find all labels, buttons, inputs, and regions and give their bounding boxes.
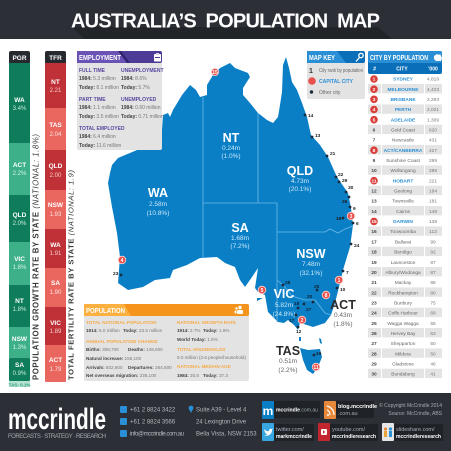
city names: Sunshine Coast — [386, 158, 421, 164]
rank numbers: 3 — [373, 97, 376, 103]
population figures: 1,309 — [427, 117, 439, 123]
city names: Bendigo — [394, 250, 412, 256]
rank numbers: 15 — [371, 219, 377, 225]
social: website: m — [263, 404, 273, 418]
icon: people — [234, 306, 243, 314]
state label: SA: 1.68m — [231, 235, 249, 242]
rank numbers: 29 — [371, 362, 377, 368]
rank numbers: 25 — [371, 321, 377, 327]
population figures: 1984: 30.5 — [177, 373, 199, 378]
panel: population growth rate column: PGR — [12, 55, 27, 62]
contact phone, fax, email — [120, 406, 184, 438]
panel: population growth rate column: 1.8% — [13, 265, 27, 271]
city names: ADELAIDE — [391, 117, 416, 123]
population figures: NATIONAL GROWTH RATE — [177, 320, 236, 325]
panel: population growth rate column: ACT — [13, 162, 26, 169]
panel: population growth rate column: NT — [15, 298, 24, 305]
city names: Wollongong — [390, 168, 416, 174]
capital city markers — [118, 68, 355, 371]
city rank labels: 17 — [289, 318, 295, 324]
employment figures: PART TIME — [79, 97, 106, 103]
state label: NSW: 7.48m — [302, 261, 320, 268]
Tasmania outline — [300, 348, 322, 374]
employment figures: UNEMPLOYMENT — [121, 68, 164, 74]
city names: Newcastle — [392, 138, 414, 144]
panel: total fertility rate column: TAS — [49, 122, 62, 129]
panel: total fertility rate column: NT — [51, 79, 60, 86]
city names: Shepparton — [391, 341, 416, 347]
panel: population growth rate column: 2.2% — [13, 171, 27, 177]
key rows: Other city — [319, 90, 341, 96]
city names: Cairns — [396, 209, 411, 215]
city names: Bunbury — [394, 300, 413, 306]
population figures: 1914: 2.7% — [177, 328, 200, 333]
rank numbers: 22 — [371, 290, 377, 296]
panel: population growth rate column: WA — [14, 97, 25, 104]
city rank labels: 21 — [330, 151, 336, 157]
state label: NT — [221, 131, 241, 160]
contact address: Suite A39 - Level 4 — [196, 408, 247, 414]
population figures: 9.0 million (2.6 people/household) — [177, 355, 246, 360]
key rows — [308, 68, 363, 96]
logo: FORECASTS · STRATEGY · RESEARCH — [8, 434, 106, 440]
rank numbers: 17 — [371, 239, 377, 245]
population figures: 620 — [429, 128, 437, 134]
rank numbers: 10 — [371, 168, 377, 174]
city names: Wagga Wagga — [387, 321, 419, 327]
panel: employment: EMPLOYMENT — [79, 55, 122, 62]
state label: VIC: (24.8%) — [273, 311, 295, 318]
state label: QLD: 4.73m — [291, 178, 309, 185]
city rank labels: 22 — [338, 172, 344, 178]
panel: total fertility rate column: TFR — [49, 55, 62, 62]
population figures: 149 — [429, 209, 437, 215]
city rank labels: 12 — [296, 329, 302, 335]
contact address — [189, 406, 257, 438]
panel: population growth rate column: 3.4% — [13, 106, 27, 112]
population figures: 46 — [430, 362, 436, 368]
population figures: 53 — [430, 331, 436, 337]
panel: city by population table: # — [373, 66, 376, 72]
population figures: 86 — [430, 280, 436, 286]
rank numbers: 12 — [371, 189, 377, 195]
state label: ACT — [330, 298, 356, 328]
rank numbers: 4 — [373, 107, 376, 113]
social: slideshare — [382, 423, 443, 441]
state label: NSW — [296, 247, 326, 277]
city rank labels: 7 — [346, 270, 349, 276]
population figures: 113 — [429, 229, 437, 235]
population figures: 50 — [430, 341, 436, 347]
panel: population growth rate column: NSW — [12, 336, 28, 343]
social: twitter: markmccrindle — [276, 434, 312, 440]
rank numbers: 27 — [371, 341, 377, 347]
state label: TAS: 0.51m — [279, 358, 297, 365]
social: youtube: youtube.com/ — [332, 427, 365, 433]
panel: population growth rate column: 1.3% — [13, 345, 27, 351]
population figures: 184 — [429, 189, 437, 195]
state label: ACT: (1.8%) — [333, 321, 353, 328]
city rank labels: 26 — [342, 199, 348, 205]
rank numbers: 19 — [371, 260, 377, 266]
copyright: © Copyright McCrindle 2014 — [379, 402, 442, 409]
population figures: 427 — [429, 148, 437, 154]
population figures: 55 — [430, 321, 436, 327]
capital city markers: 2 — [301, 318, 304, 324]
population figures: 50 — [430, 351, 436, 357]
city rank labels: 24 — [354, 243, 360, 249]
map of Australia — [108, 57, 360, 374]
rank numbers: 23 — [371, 300, 377, 306]
state label: NT: (1.0%) — [221, 153, 241, 160]
contact address: 24 Lexington Drive — [196, 420, 247, 426]
rank numbers: 2 — [373, 87, 376, 93]
panel: population growth rate column: QLD — [13, 212, 27, 219]
social: slideshare: slideshare.com/ — [396, 427, 435, 433]
rank numbers: 26 — [371, 331, 377, 337]
population figures — [86, 320, 246, 378]
rank numbers: 5 — [373, 117, 376, 123]
population figures: 299 — [429, 158, 437, 164]
rank numbers: 1 — [373, 77, 376, 83]
copyright: Source: McCrindle, ABS — [388, 411, 443, 417]
panel: city by population table: CITY BY POPULATION — [370, 55, 428, 62]
rank numbers: 13 — [371, 199, 377, 205]
icon: clipboard — [154, 53, 161, 62]
city rank labels: 30 — [348, 185, 354, 191]
population figures: 289 — [429, 168, 437, 174]
panel: population — [84, 304, 249, 381]
social: youtube: mccrindleresearch — [332, 434, 377, 440]
panel: total fertility rate column: ACT — [49, 357, 62, 364]
population figures: 4,423 — [427, 87, 439, 93]
employment figures: UNEMPLOYED — [121, 97, 157, 103]
city names: Bundaberg — [391, 372, 415, 378]
contact phone, fax, email: +61 2 8824 3422 — [130, 408, 176, 414]
panel: city by population table: CITY — [396, 66, 408, 72]
city rank labels: 23 — [113, 271, 119, 277]
population figures: 87 — [430, 270, 436, 276]
employment figures: Today: 11.6 million — [79, 143, 122, 149]
panel: city by population table: '000 — [428, 66, 438, 72]
city names: Geelong — [394, 189, 412, 195]
city names: Coffs Harbour — [388, 311, 418, 317]
rank numbers: 6 — [373, 128, 376, 134]
icon: australia — [434, 54, 442, 61]
population figures: Natural increase: 159,100 — [86, 356, 142, 361]
population figures: 181 — [429, 199, 437, 205]
city names: Ballarat — [395, 239, 412, 245]
population figures: Arrivals: 502,600 — [86, 365, 123, 370]
population figures: 87 — [430, 260, 436, 266]
panel: total fertility rate column: VIC — [50, 320, 61, 327]
panel: total fertility rate column: 1.93 — [50, 212, 62, 218]
panel: total fertility rate column: 1.90 — [50, 290, 62, 296]
population figures: 99 — [430, 239, 436, 245]
vertical label: total fertility rate: TOTAL FERTILITY RATE BY STATE (NATIONAL: 1.9) — [66, 170, 76, 380]
city names: PERTH — [395, 107, 412, 113]
employment figures: 1984: 0.60 million — [121, 105, 161, 111]
state label: TAS: TAS — [276, 344, 300, 358]
population figures: 92 — [430, 250, 436, 256]
icon: magnifier — [356, 53, 363, 62]
employment figures: 1984: 5.3 million — [79, 76, 116, 82]
key rows: City rank by population — [319, 68, 363, 74]
population figures: World Today: 1.0% — [177, 337, 218, 342]
panel: total fertility rate column: SA — [51, 280, 60, 287]
city names: HOBART — [393, 178, 413, 184]
state label: WA: 2.58m — [149, 201, 167, 208]
state label: NT: 0.24m — [222, 145, 240, 152]
state label: ACT: ACT — [330, 298, 356, 312]
footer — [0, 393, 451, 451]
state label: WA: (10.8%) — [147, 210, 169, 217]
population figures: Today: 1.8% — [203, 328, 229, 333]
city names: Toowoomba — [390, 229, 416, 235]
employment figures: 1984: 8.6% — [121, 76, 147, 82]
panel: total fertility rate column: QLD — [49, 163, 63, 170]
vertical label: population growth rate: POPULATION GROWTH RATE BY STATE (NATIONAL: 1.8%) — [32, 134, 40, 380]
population figures: Today: 23.5 million — [123, 328, 163, 333]
state label: QLD: (20.1%) — [289, 186, 311, 193]
logo — [8, 403, 106, 440]
state label: VIC: VIC — [274, 287, 294, 301]
rank numbers: 28 — [371, 351, 377, 357]
employment figures: 1984: 1.1 million — [79, 105, 116, 111]
city rank labels: 27 — [306, 307, 312, 313]
city rank labels: 18 — [294, 301, 300, 307]
population figures: Net overseas migration: 238,100 — [86, 373, 157, 378]
rank numbers: 20 — [371, 270, 377, 276]
panel: total fertility rate column: 1.79 — [50, 367, 62, 373]
social: twitter — [262, 423, 314, 441]
city names: Gold Coast — [391, 128, 416, 134]
state label: VIC — [273, 287, 295, 318]
city rank labels: 28 — [285, 280, 291, 286]
social: blog: .com.au — [338, 411, 358, 417]
city names: Gladstone — [392, 362, 414, 368]
city rank labels: 13 — [315, 133, 321, 139]
city rank labels: 29 — [342, 178, 348, 184]
capital city markers: 3 — [350, 214, 353, 220]
panel: population growth rate column: VIC — [14, 256, 25, 263]
population figures: Births: 308,700 — [86, 347, 119, 352]
state label: TAS — [276, 344, 300, 374]
key rows: 1 — [309, 68, 313, 75]
contact phone, fax, email: info@mccrindle.com.au — [130, 432, 184, 438]
other city dots — [120, 114, 354, 356]
city names: ACT/CANBERRA — [384, 148, 423, 154]
city names: Launceston — [391, 260, 416, 266]
population figures: 4,819 — [427, 77, 439, 83]
city names: MELBOURNE — [388, 87, 419, 93]
panel: population: POPULATION — [86, 308, 125, 315]
population figures: 431 — [429, 138, 437, 144]
rank numbers: 18 — [371, 250, 377, 256]
social: website: mccrindle.com.au — [276, 408, 318, 414]
panel: map key: MAP KEY — [309, 55, 335, 62]
rank numbers: 7 — [373, 138, 376, 144]
population figures: 41 — [430, 372, 436, 378]
state label: NSW: NSW — [296, 247, 326, 261]
social: twitter: twitter.com/ — [276, 427, 304, 433]
employment figures: TOTAL EMPLOYED — [79, 126, 125, 132]
population figures: Departures: 264,500 — [128, 365, 172, 370]
state label: SA: (7.2%) — [230, 243, 250, 250]
capital city markers: 15 — [212, 70, 218, 76]
state borders — [203, 97, 353, 322]
rank numbers: 9 — [373, 158, 376, 164]
state label: WA: WA — [148, 186, 168, 200]
population figures: 75 — [430, 300, 436, 306]
city rank labels: 16 — [336, 216, 342, 222]
population figures: TOTAL HOUSEHOLDS — [177, 347, 226, 352]
capital city markers: 5 — [261, 288, 264, 294]
city names: Rockhampton — [388, 290, 418, 296]
state label: NT: NT — [223, 131, 240, 145]
panel: total fertility rate column: 2.21 — [50, 88, 62, 94]
panel: employment — [77, 51, 164, 150]
employment figures — [79, 68, 164, 149]
social: youtube — [318, 423, 378, 441]
city rank labels: 9 — [353, 206, 356, 212]
population figures: ANNUAL POPULATION CHANGE — [86, 339, 158, 344]
state label: SA: SA — [231, 221, 249, 235]
social: website — [262, 401, 320, 419]
population figures: 2,293 — [427, 97, 439, 103]
city names: SYDNEY — [393, 77, 414, 83]
Bass Strait islands — [257, 298, 322, 344]
city names: Mackay — [395, 280, 412, 286]
employment figures: Today: 3.5 million — [79, 114, 119, 120]
panel: total fertility rate column: 2.04 — [50, 132, 62, 138]
city rank labels: 14 — [308, 113, 314, 119]
city names: DARWIN — [393, 219, 413, 225]
employment figures: Today: 8.1 million — [79, 85, 119, 91]
population figures: 80 — [430, 290, 436, 296]
capital city markers: 8 — [325, 293, 328, 299]
population figures: 138 — [429, 219, 437, 225]
rank numbers: 24 — [371, 311, 377, 317]
city rank labels: 19 — [316, 351, 322, 357]
capital city markers: 1 — [338, 278, 341, 284]
population figures — [427, 77, 439, 378]
city rank labels: 25 — [314, 284, 320, 290]
contact phone, fax, email: +61 2 8824 3566 — [130, 420, 176, 426]
population figures: 221 — [429, 178, 437, 184]
population figures: Today: 37.3 — [203, 373, 228, 378]
title banner — [0, 0, 451, 39]
city names: BRISBANE — [390, 97, 416, 103]
city rank labels — [113, 113, 360, 357]
population figures: TOTAL NATIONAL POPULATION — [86, 320, 157, 325]
rank numbers: 30 — [371, 372, 377, 378]
social: blog — [324, 401, 377, 419]
panel: population growth rate column: SA — [15, 362, 24, 369]
state label: ACT: 0.43m — [334, 312, 352, 319]
city names: Mildura — [395, 351, 411, 357]
panel: total fertility rate column: 2.00 — [50, 173, 62, 179]
employment figures: Today: 5.7% — [121, 85, 150, 91]
panel: population growth rate column: TAS: 0.1% — [9, 382, 30, 388]
population figures: NATIONAL MEDIAN AGE — [177, 364, 231, 369]
state label: TAS: (2.2%) — [278, 367, 298, 374]
population figures: 68 — [430, 311, 436, 317]
employment figures: FULL TIME — [79, 68, 106, 74]
social: blog: blog.mccrindle — [338, 404, 377, 410]
panel: population growth rate column: 2.0% — [13, 221, 27, 227]
panel: total fertility rate column — [45, 51, 66, 382]
population figures: Deaths: 149,600 — [128, 347, 163, 352]
panel: total fertility rate column: NSW — [48, 202, 64, 209]
panel: population growth rate column: 1.8% — [13, 307, 27, 313]
panel: city by population table — [368, 51, 442, 378]
population figures: 2,021 — [427, 107, 439, 113]
panel: total fertility rate column: 1.89 — [50, 329, 62, 335]
panel: total fertility rate column: WA — [50, 242, 61, 249]
city names: Hervey Bay — [391, 331, 416, 337]
logo: mccrindle — [8, 403, 106, 436]
rank numbers: 21 — [371, 280, 377, 286]
key rows: CAPITAL CITY — [319, 79, 354, 85]
panel: population growth rate column: 0.9% — [13, 371, 27, 377]
panel: total fertility rate column: 1.91 — [50, 251, 62, 257]
rank numbers: 8 — [373, 148, 376, 154]
employment figures: 1984: 6.4 million — [79, 134, 116, 140]
panel: map key — [307, 51, 365, 99]
state label: WA — [147, 186, 169, 217]
population figures: 1914: 5.0 million — [86, 328, 120, 333]
city rank labels: 20 — [307, 294, 313, 300]
panel: population growth rate column — [9, 51, 30, 388]
capital city markers: 4 — [121, 258, 124, 264]
city rank labels: 10 — [340, 287, 346, 293]
rank numbers — [371, 77, 377, 378]
employment figures: Today: 0.71 million — [121, 114, 164, 120]
contact address: Bella Vista, NSW 2153 — [196, 432, 257, 438]
title banner: AUSTRALIA’S POPULATION MAP — [71, 10, 380, 32]
city names: Albury/Wodonga — [385, 270, 421, 276]
state label: QLD — [287, 164, 313, 193]
city names — [384, 77, 423, 378]
rank numbers: 11 — [371, 178, 377, 184]
city names: Townsville — [392, 199, 414, 205]
social: slideshare: mccrindleresearch — [396, 434, 442, 440]
copyright — [379, 402, 443, 417]
capital rank badges — [370, 75, 378, 225]
state label: VIC: 5.82m — [275, 302, 293, 309]
city rank labels: 6 — [356, 221, 359, 227]
state label: SA — [230, 221, 250, 250]
capital city markers: 11 — [313, 365, 319, 371]
rank numbers: 14 — [371, 209, 377, 215]
rank numbers: 16 — [371, 229, 377, 235]
table row stripes — [368, 84, 442, 378]
mainland outline — [108, 57, 353, 330]
state label: QLD: QLD — [287, 164, 313, 178]
state label: NSW: (32.1%) — [300, 270, 322, 277]
